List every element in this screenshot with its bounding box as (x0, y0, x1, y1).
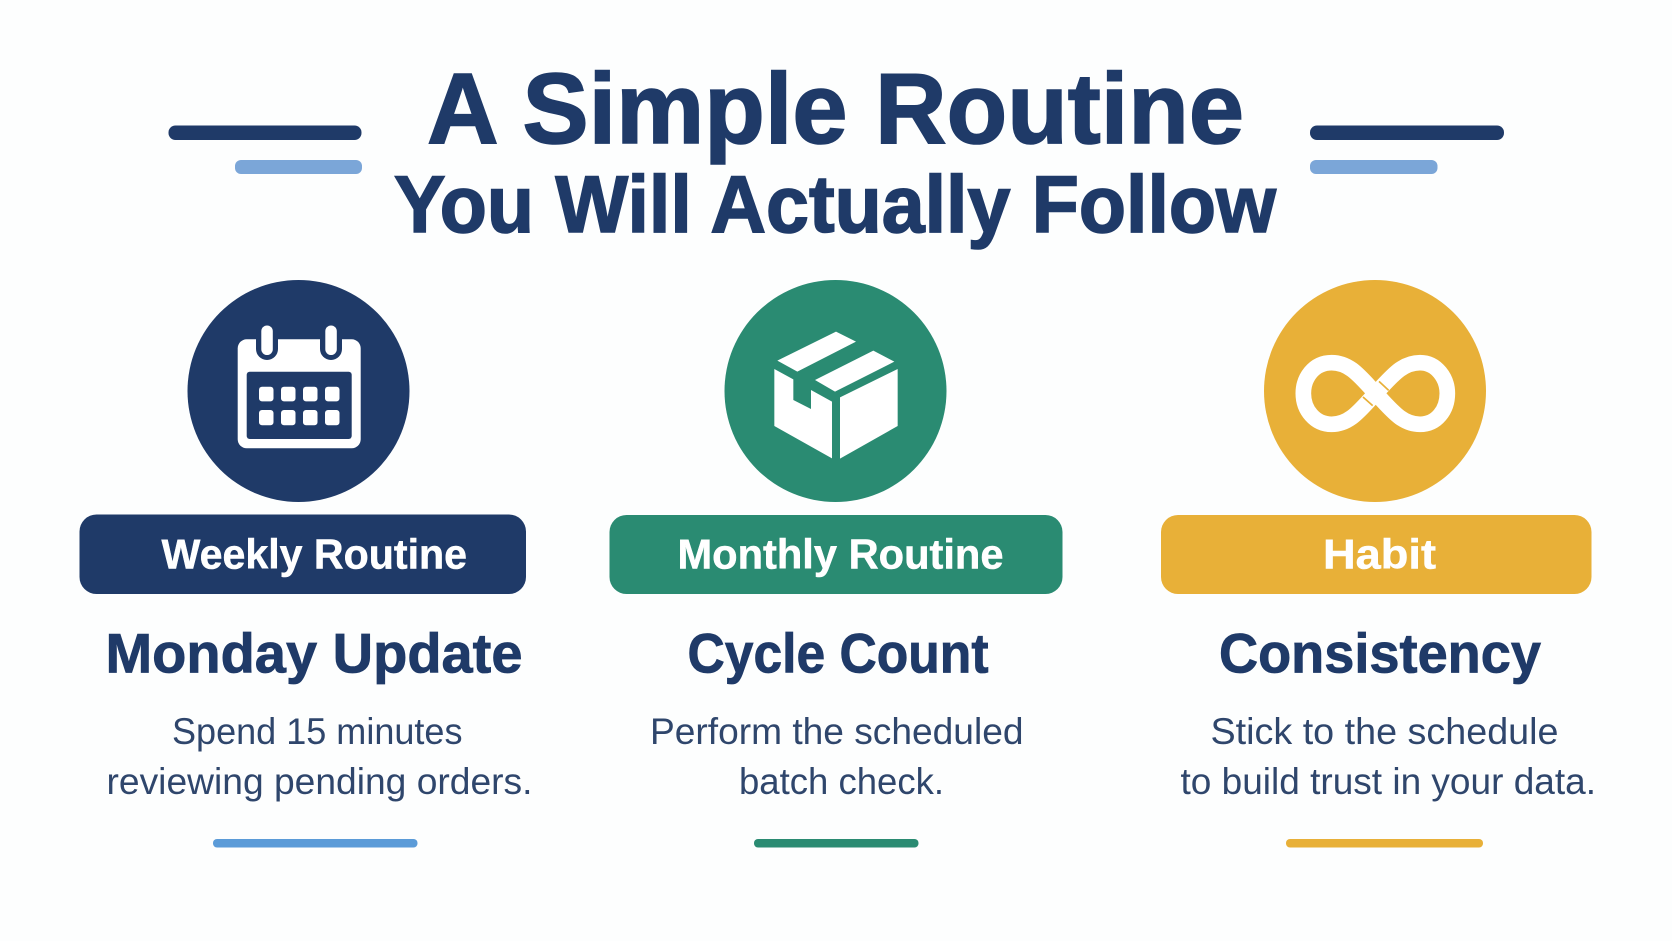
badge: weekly routine (80, 514, 526, 594)
left title accent bars (168, 126, 362, 174)
badge: habit (1161, 515, 1592, 594)
description: consistency (1180, 711, 1596, 802)
description: monday update (106, 711, 532, 802)
panel: weekly routine (80, 280, 532, 848)
underline accent: habit (1286, 839, 1483, 848)
heading: cycle count: Cycle Count (688, 622, 988, 684)
description: cycle count: Perform the scheduled (650, 711, 1024, 752)
panel: habit (1161, 280, 1596, 848)
icon: box (724, 280, 946, 502)
title: A Simple Routine (427, 53, 1244, 165)
heading: consistency: Consistency (1219, 622, 1541, 684)
description: consistency: to build trust in your data. (1180, 761, 1596, 802)
badge: weekly routine: Weekly Routine (162, 530, 467, 578)
description: consistency: Stick to the schedule (1210, 711, 1558, 752)
badge: monthly routine: Monthly Routine (678, 530, 1004, 578)
description: monday update: Spend 15 minutes (172, 711, 462, 752)
right title accent bars (1310, 126, 1504, 174)
description: cycle count (650, 711, 1024, 802)
title: You Will Actually Follow (394, 160, 1277, 250)
description: cycle count: batch check. (739, 761, 944, 802)
header (168, 53, 1504, 250)
underline accent: weekly (213, 839, 418, 848)
heading: monday update: Monday Update (106, 622, 522, 684)
description: monday update: reviewing pending orders. (106, 761, 532, 802)
icon: calendar (188, 280, 410, 502)
badge: habit: Habit (1323, 530, 1436, 578)
title (394, 53, 1277, 250)
icon: infinity (1264, 280, 1486, 502)
badge: monthly routine (610, 515, 1062, 594)
panel: monthly routine (610, 280, 1062, 848)
underline accent: monthly (754, 839, 918, 848)
